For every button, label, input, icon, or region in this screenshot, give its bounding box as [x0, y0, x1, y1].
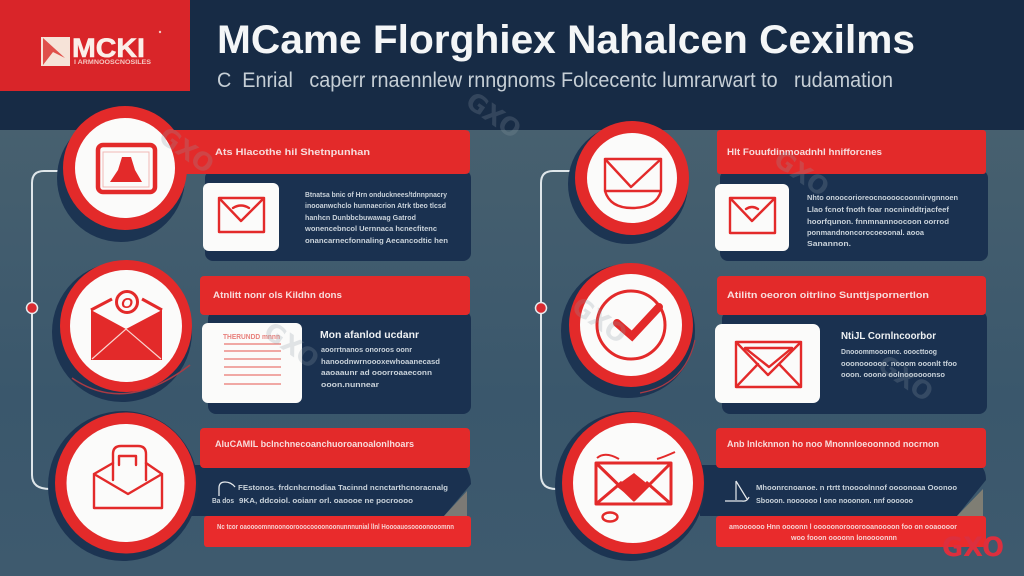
- panel: right item 1: [715, 130, 988, 261]
- text block: 9KA, ddcoiol. ooianr orl. oaoooe ne pocroooo: [239, 496, 414, 505]
- connector: left timeline: [26, 171, 63, 489]
- text block: ooonoooooo. nooom ooonlt tfoo: [841, 359, 958, 368]
- text block: FEstonos. frdcnhcrnodiaa Tacinnd ncnctarthcnoracnalg: [238, 483, 448, 492]
- text block: Sanannon.: [807, 239, 851, 248]
- text block: inooanwchclo hunnaecrion Atrk tbeo tlcsd: [305, 201, 446, 210]
- icon card: document lines: THERUNDD mnnn: [223, 334, 280, 341]
- icon card: envelope: [715, 324, 820, 403]
- connector: right timeline: [536, 171, 576, 489]
- header bar: [716, 428, 986, 468]
- corner fold: [444, 491, 467, 516]
- watermarks: GXO: [154, 121, 219, 179]
- header bar: [200, 276, 470, 315]
- watermarks: GXO: [873, 349, 938, 407]
- text block: hanhcn Dunbbcbuwawag Gatrod: [305, 213, 416, 222]
- icon: right circle 2: [561, 263, 695, 398]
- text block: [304, 190, 448, 245]
- icon: right circle 1: [568, 121, 689, 244]
- icon: left circle 2: [52, 260, 192, 402]
- icon: right circle 3: [555, 411, 705, 561]
- header band: [0, 0, 1024, 130]
- panel: right item 3: [700, 428, 986, 547]
- text block: hoorfqunon. fnnmnannoocoon oorrod: [807, 217, 949, 226]
- corner fold: [957, 489, 983, 516]
- logo block: I ARMNOOSCNOSILES: [74, 60, 151, 66]
- text block: hanoodnwrnoooxewhoaanecasd: [321, 357, 440, 366]
- watermarks: [154, 86, 938, 407]
- callout bar: [716, 516, 986, 547]
- small icon: bracket: Ba dos: [212, 496, 234, 505]
- header bar: [160, 130, 470, 174]
- text block: ponmandnoncorocoeoonal. aooa: [807, 228, 925, 237]
- text block: ooon.nunnear: [321, 380, 379, 389]
- logo block: [0, 0, 190, 91]
- text block: Btnatsa bnic of Hrn onducknees/tdnnpnacry: [305, 190, 447, 199]
- text block: Llao fcnot fnoth foar nocninddtrjacfeef: [807, 205, 950, 214]
- panel: left item 3: [190, 428, 471, 547]
- text block: Mon afanlod ucdanr: [320, 329, 419, 341]
- panel: right item 2: [715, 276, 987, 414]
- header bar: Atnlitt nonr ols Kildhn dons: [213, 290, 342, 301]
- icon card: document lines: [202, 323, 302, 403]
- icon: left circle 2: O: [121, 295, 133, 312]
- watermarks: GXO: [461, 86, 526, 144]
- icon: left circle 1: [57, 106, 187, 242]
- header bar: AluCAMIL bclnchnecoanchuoroanoalonlhoars: [215, 439, 414, 450]
- text block: [807, 193, 958, 248]
- text block: Mhoonrcnoanoe. n rtrtt tnoooolnnof oooonoaa Ooonoo: [756, 483, 958, 492]
- subtitle: C Enrial caperr rnaennlew rnngnoms Folcecentc lumrarwart to rudamation: [217, 69, 893, 92]
- header bar: Ats Hlacothe hil Shetnpunhan: [215, 147, 370, 158]
- text block: [320, 329, 440, 389]
- header bar: [200, 428, 470, 468]
- panel: left item 2: [200, 276, 471, 414]
- text block: Nhto onoocorioreocnoooocoonnirvgnnoen: [807, 193, 958, 202]
- small icon: sail: [725, 481, 749, 501]
- header bar: Anb lnlcknnon ho noo Mnonnloeoonnod nocrnon: [727, 439, 939, 450]
- watermark: red GXO: GXO: [942, 532, 1004, 563]
- panel: left item 1: [160, 130, 471, 261]
- callout bar: amoooooo Hnn oooonn l ooooonorooorooanoooon foo on ooaoooor: [729, 524, 957, 531]
- icon: left circle 3: [48, 411, 198, 561]
- text block: NtiJL Cornlncoorbor: [841, 330, 936, 342]
- watermarks: GXO: [259, 316, 324, 374]
- text block: aaoaaunr ad ooorroaaeconn: [321, 368, 432, 377]
- text block: onancarnecfonnaling Aecancodtic hen: [305, 236, 448, 245]
- text block: Sbooon. noooooo l ono nooonon. nnf oooooo: [756, 496, 914, 505]
- callout bar: [204, 516, 471, 547]
- title: MCame Florghiex Nahalcen Cexilms: [217, 18, 915, 62]
- callout bar: Nc tcor oaoooomnnoonoorooocoooonoonunnnunial llnl Hoooauosoooonooomnn: [217, 524, 454, 531]
- text block: ooon. ooono oolnoooooonso: [841, 370, 946, 379]
- watermarks: GXO: [567, 291, 632, 349]
- text block: Dnooommooonnc. ooocttoog: [841, 347, 937, 356]
- icon card: envelope: [203, 183, 279, 251]
- text block: aoorrtnanos onoroos oonr: [321, 345, 412, 354]
- text block: [841, 330, 958, 379]
- text block: [756, 483, 958, 505]
- text block: [238, 483, 448, 505]
- header bar: Atilitn oeoron oitrlino Sunttjspornertlon: [727, 290, 929, 301]
- text block: wonencebncol Uernnaca hcnecfitenc: [304, 224, 437, 233]
- icon card: envelope: [715, 184, 789, 251]
- header bar: Hlt Fouufdinmoadnhl hnifforcnes: [727, 147, 882, 158]
- small icon: bracket: [212, 482, 235, 505]
- watermarks: GXO: [769, 144, 834, 202]
- header bar: [717, 130, 986, 174]
- logo block: MCKI: [72, 33, 145, 63]
- callout bar: woo fooon oooonn lonoooonnn: [790, 535, 897, 542]
- header bar: [717, 276, 986, 315]
